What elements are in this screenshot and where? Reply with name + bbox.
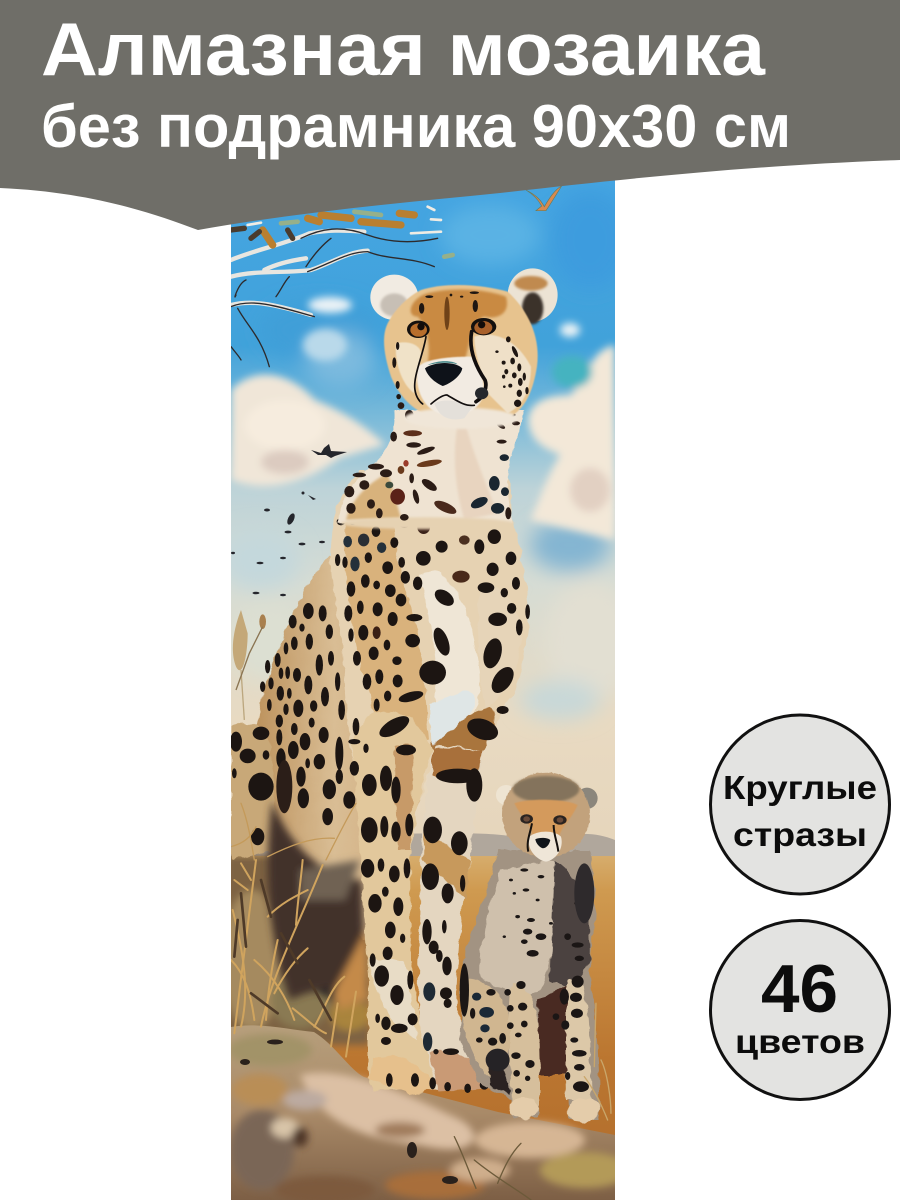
front leg left (352, 712, 436, 1094)
savanna horizon (231, 834, 615, 1135)
badge: round rhinestones: стразы (733, 816, 867, 853)
cub body (460, 850, 600, 1122)
adult cheetah (230, 268, 558, 1094)
subtitle: без подрамника 90х30 см (41, 93, 791, 160)
cub body spots (460, 863, 594, 1094)
face spots (392, 291, 529, 407)
banner shape (0, 0, 900, 230)
dry grass foreground (231, 860, 611, 1200)
badge: round rhinestones (710, 715, 890, 894)
sky brush patches (220, 190, 635, 720)
ground (228, 1025, 630, 1200)
tree branches (231, 207, 453, 367)
ears (370, 268, 558, 324)
toes (386, 1073, 489, 1093)
cub face (520, 814, 567, 862)
shadowed underbelly (268, 800, 368, 1010)
flock of birds (231, 444, 347, 596)
badge: 46 colours: цветов (735, 1023, 865, 1060)
cheetah lower leg spots (361, 858, 489, 1093)
poster image: cheetah and cub (220, 176, 635, 1200)
badge: 46 colours: 46 (761, 951, 838, 1027)
small haunch and upper leg spots (230, 727, 482, 855)
badge: 46 colours (710, 920, 890, 1100)
tear lines (415, 332, 486, 405)
forehead and bridge (411, 290, 507, 363)
badge: round rhinestones: Круглые (723, 769, 877, 806)
cheetah cub (460, 772, 600, 1122)
dry grass backdrop (222, 855, 370, 1045)
chest and shoulder spots (335, 518, 530, 744)
cheek patches (474, 335, 531, 413)
dry plant (233, 610, 266, 720)
cheetah neck (338, 402, 524, 529)
nose (425, 363, 462, 386)
cheetah body spots (230, 518, 530, 855)
foliage (263, 213, 414, 245)
front torso (330, 470, 529, 800)
cheetah back and haunch (231, 555, 430, 940)
title: Алмазная мозаика (41, 7, 766, 91)
cloud right (528, 323, 615, 540)
haunch spots (260, 603, 355, 825)
front leg right (418, 745, 494, 1092)
neck markings (344, 402, 520, 521)
cub head (496, 772, 598, 862)
cloud left (231, 297, 385, 486)
eyes (407, 318, 496, 338)
muzzle (417, 357, 484, 416)
chin ruff (404, 408, 518, 429)
bird in the sky (526, 186, 562, 211)
sky (231, 176, 615, 856)
cheetah head (370, 268, 558, 429)
top banner (0, 0, 900, 230)
